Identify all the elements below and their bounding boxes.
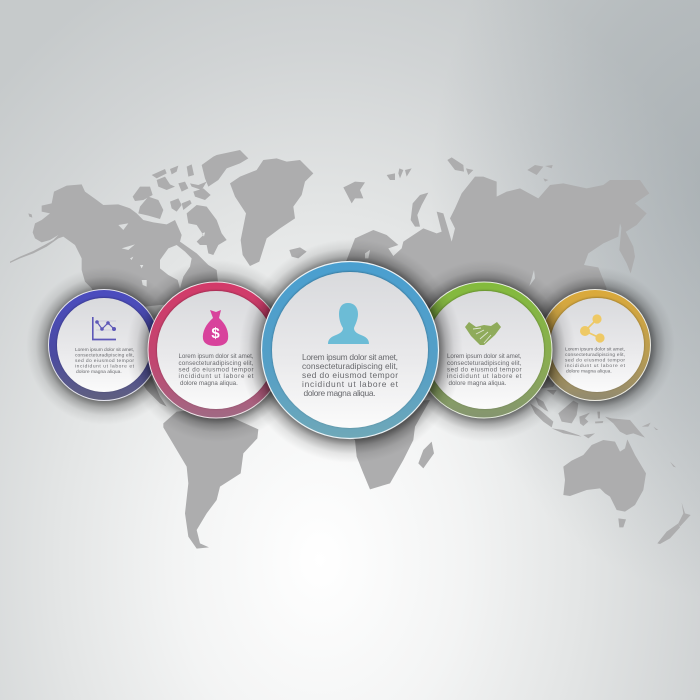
purple ring	[48, 290, 160, 400]
green disc	[426, 291, 544, 409]
panel: purple circle	[26, 267, 184, 425]
gold shadow	[517, 267, 675, 425]
pink text: dolore magna aliqua.	[180, 380, 238, 387]
icon: handshake	[465, 322, 501, 345]
icon: line chart	[92, 317, 116, 340]
map: Southeast Asia and Oceania	[530, 390, 691, 544]
pink text: consecteturadipiscing elit,	[178, 360, 254, 367]
blue text	[302, 352, 399, 398]
green text: dolore magna aliqua.	[448, 380, 507, 387]
blue ring	[262, 262, 438, 438]
pink text: incididunt ut labore et	[178, 373, 254, 380]
blue text: consecteturadipiscing elit,	[302, 361, 398, 371]
pink shadow	[126, 260, 308, 442]
green text: sed do eiusmod tempor	[447, 366, 522, 374]
purple text	[75, 347, 135, 375]
green text	[447, 353, 522, 387]
blue shadow	[239, 239, 463, 463]
panel: green circle	[394, 260, 576, 442]
purple text: consecteturadipiscing elit,	[75, 353, 134, 359]
purple shadow	[26, 267, 184, 425]
icon: person	[328, 303, 369, 344]
map: Eurasia	[340, 157, 649, 400]
panel: gold circle	[517, 267, 675, 425]
blue text: incididunt ut labore et	[302, 379, 399, 389]
green ring	[416, 282, 552, 418]
gold text: sed do eiusmod tempor	[565, 358, 625, 364]
map: Greenland and South America	[133, 158, 313, 549]
purple text: sed do eiusmod tempor	[75, 358, 134, 364]
gold text: incididunt ut labore et	[565, 363, 626, 369]
gold ring	[540, 290, 650, 400]
icon: share	[580, 314, 605, 343]
green text: Lorem ipsum dolor sit amet,	[447, 353, 522, 360]
gold text	[565, 346, 626, 374]
purple text: dolore magna aliqua.	[76, 369, 122, 375]
green text: consecteturadipiscing elit,	[447, 360, 522, 367]
blue disc	[272, 272, 428, 428]
blue text: sed do eiusmod tempor	[302, 370, 398, 380]
world map	[10, 150, 691, 549]
blue text: Lorem ipsum dolor sit amet,	[302, 352, 398, 362]
panel: pink circle	[126, 260, 308, 442]
pink text	[178, 353, 254, 387]
icon: money bag: $	[211, 325, 220, 342]
gold text: consecteturadipiscing elit,	[565, 352, 625, 358]
map: North America	[10, 150, 248, 312]
map: Africa and Madagascar	[340, 400, 434, 489]
gold text: dolore magna aliqua.	[566, 368, 612, 374]
purple text: incididunt ut labore et	[75, 364, 135, 370]
pink text: sed do eiusmod tempor	[178, 366, 254, 374]
blue text: dolore magna aliqua.	[304, 388, 376, 398]
green shadow	[394, 260, 576, 442]
green text: incididunt ut labore et	[447, 373, 522, 380]
panel: blue circle	[239, 239, 463, 463]
gold text: Lorem ipsum dolor sit amet,	[565, 346, 625, 352]
pink text: Lorem ipsum dolor sit amet,	[178, 353, 254, 360]
gold disc	[550, 298, 644, 392]
pink ring	[148, 282, 284, 418]
purple text: Lorem ipsum dolor sit amet,	[75, 347, 134, 353]
pink disc	[157, 291, 275, 409]
purple disc	[57, 298, 151, 392]
icon: money bag	[203, 310, 228, 346]
